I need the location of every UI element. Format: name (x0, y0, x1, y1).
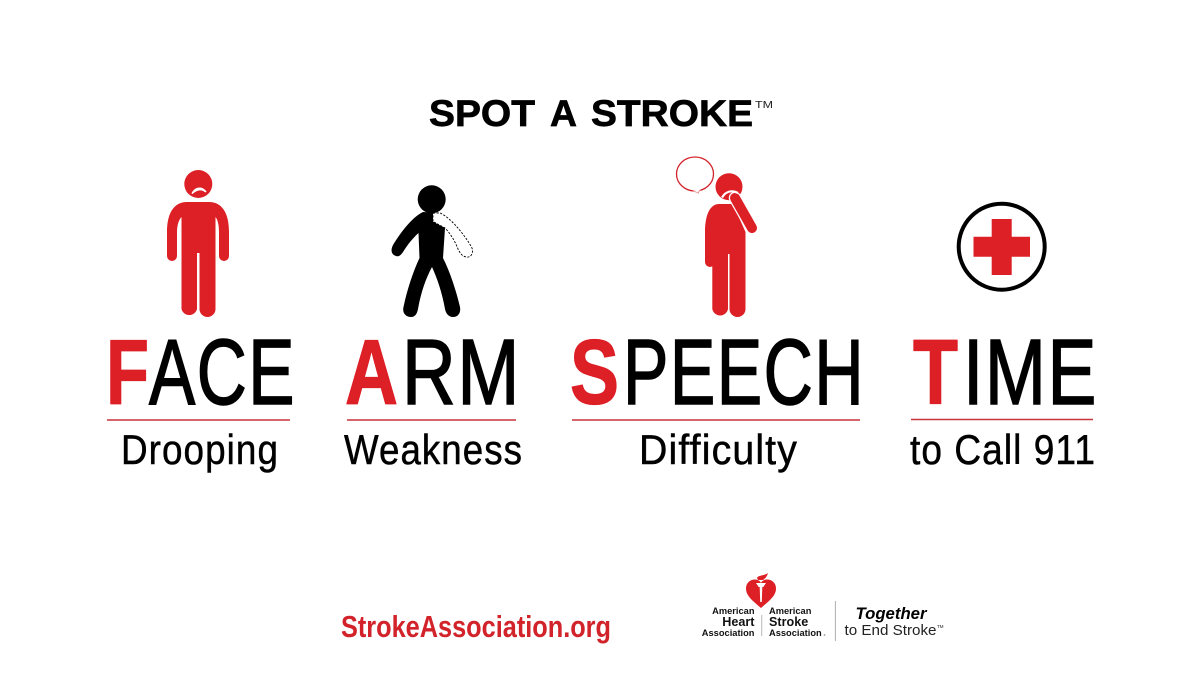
word: ARM: A (345, 322, 398, 424)
title: STROKE (591, 92, 753, 134)
icon: medical cross in circle (959, 204, 1045, 290)
icon: person with weak arm (392, 185, 473, 317)
icon: person with speech difficulty (676, 157, 752, 317)
logo: American Heart and American Stroke Association (702, 573, 944, 641)
title: SPOT (429, 92, 535, 134)
website link: StrokeAssociation.org (341, 609, 611, 644)
title: A (550, 92, 577, 134)
word: FACE: ACE (149, 320, 296, 424)
word: FACE: F (106, 322, 149, 424)
title: TM (755, 99, 773, 111)
logo: American Heart and American Stroke Association: Association (769, 628, 822, 638)
word: SPEECH (570, 320, 865, 424)
word: SPEECH: PEECH (623, 320, 865, 424)
logo: American Heart and American Stroke Association: to End Stroke (844, 622, 936, 639)
word: SPEECH: S (570, 322, 619, 424)
subtitle: Drooping: Drooping (121, 426, 279, 473)
subtitle: Weakness: Weakness (344, 426, 523, 473)
logo: American Heart and American Stroke Association: TM (937, 624, 944, 629)
word: TIME (913, 320, 1098, 424)
subtitle: Difficulty: Difficulty (639, 426, 798, 473)
subtitle: to Call 911: to Call 911 (910, 426, 1096, 473)
title (429, 92, 773, 134)
icon: heart and torch (746, 573, 776, 608)
logo: American Heart and American Stroke Association: Association (702, 628, 755, 638)
logo: American Heart and American Stroke Association: Together (856, 605, 928, 623)
icon: person with drooping face (167, 170, 229, 317)
logo: American Heart and American Stroke Association: Stroke (769, 615, 808, 629)
logo: American Heart and American Stroke Association: American (769, 606, 812, 616)
word: ARM (345, 320, 521, 424)
word: TIME: IME (963, 320, 1098, 424)
logo: American Heart and American Stroke Association: Heart (722, 615, 755, 629)
word: TIME: T (913, 322, 958, 424)
word: ARM: RM (402, 320, 521, 424)
word: FACE (106, 320, 296, 424)
logo: American Heart and American Stroke Association: American (712, 606, 755, 616)
